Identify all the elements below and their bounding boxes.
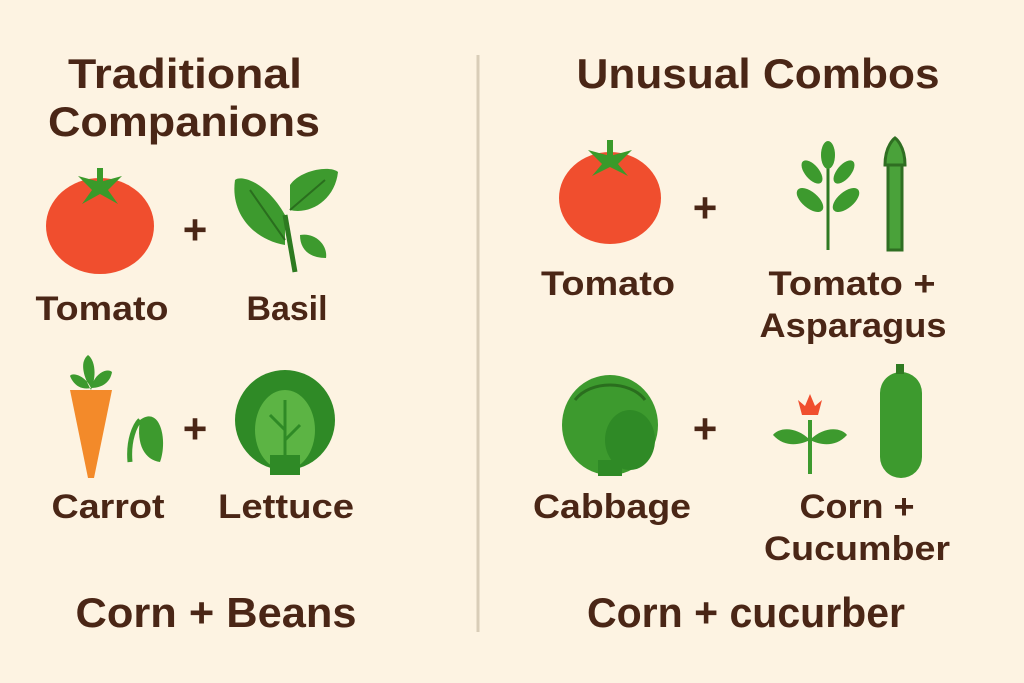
label: basil: Basil: [246, 290, 328, 328]
icon: flower: [773, 394, 847, 474]
icon: basil: [234, 169, 338, 272]
icon: tomato left: [46, 168, 154, 274]
label: corn + cucumber: Cucumber: [764, 530, 950, 568]
icon: lettuce: [235, 370, 335, 475]
footer: corn + beans: Corn + Beans: [76, 589, 356, 636]
label: corn + cucumber: [764, 488, 950, 568]
title: unusual combos: Unusual Combos: [576, 50, 940, 97]
label: corn + cucumber: Corn +: [800, 488, 914, 526]
footer: corn + cucurber: Corn + cucurber: [587, 589, 905, 636]
icon: carrot: [70, 355, 163, 478]
plus: +: [183, 206, 207, 253]
icon: sprig: [793, 141, 863, 250]
plus: +: [693, 184, 717, 231]
icon: tomato right: [559, 140, 661, 244]
icon: cucumber: [880, 364, 922, 478]
title: traditional companions: Traditional: [68, 50, 302, 97]
title: traditional companions: [48, 50, 320, 145]
plus: +: [183, 405, 207, 452]
label: tomato: Tomato: [541, 265, 675, 303]
icon: asparagus: [885, 138, 905, 250]
label: carrot: Carrot: [52, 488, 164, 526]
label: tomato + asparagus: Asparagus: [760, 307, 946, 345]
label: cabbage: Cabbage: [533, 488, 691, 526]
label: lettuce: Lettuce: [218, 488, 354, 526]
label: tomato: Tomato: [36, 290, 168, 328]
label: tomato + asparagus: Tomato +: [768, 265, 936, 303]
icon: cabbage: [562, 375, 658, 476]
label: tomato + asparagus: [760, 265, 946, 345]
plus: +: [693, 405, 717, 452]
title: traditional companions: Companions: [48, 98, 320, 145]
